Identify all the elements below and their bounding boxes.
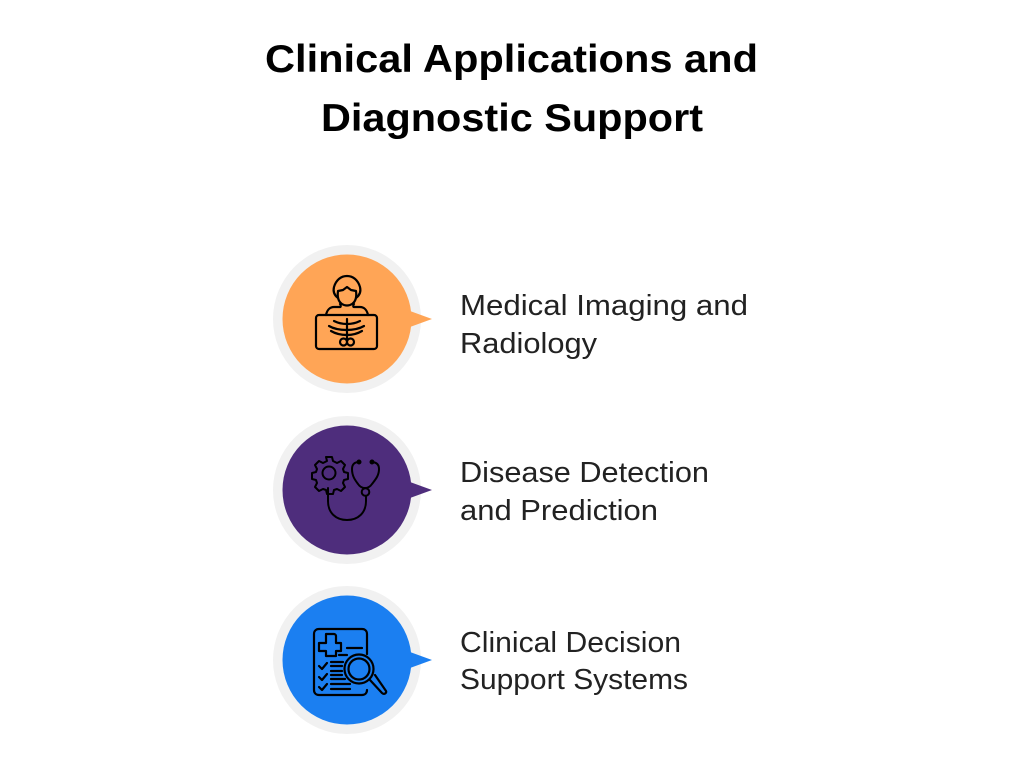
orange circle badge xyxy=(273,245,432,393)
icon: medical report and magnifier xyxy=(314,629,386,695)
title xyxy=(265,38,758,140)
title: Diagnostic Support xyxy=(321,97,703,140)
title: Clinical Applications and xyxy=(265,38,758,81)
blue circle badge xyxy=(273,586,432,734)
text: disease detection and prediction: and Prediction xyxy=(460,495,658,527)
text: medical imaging and radiology xyxy=(460,290,748,360)
text: disease detection and prediction: Disease Detection xyxy=(460,457,709,489)
icon: gear and stethoscope xyxy=(312,457,379,520)
text: clinical decision support systems: Clinical Decision xyxy=(460,627,681,659)
text: clinical decision support systems: Support Systems xyxy=(460,664,688,696)
purple circle badge xyxy=(273,416,432,564)
text: medical imaging and radiology: Medical Imaging and xyxy=(460,290,748,322)
text: disease detection and prediction xyxy=(460,457,709,527)
item: disease detection xyxy=(273,416,432,564)
item: clinical decision support xyxy=(273,586,432,734)
text: clinical decision support systems xyxy=(460,627,688,696)
item: medical imaging xyxy=(273,245,432,393)
text: medical imaging and radiology: Radiology xyxy=(460,328,598,360)
icon: x-ray xyxy=(316,276,377,349)
